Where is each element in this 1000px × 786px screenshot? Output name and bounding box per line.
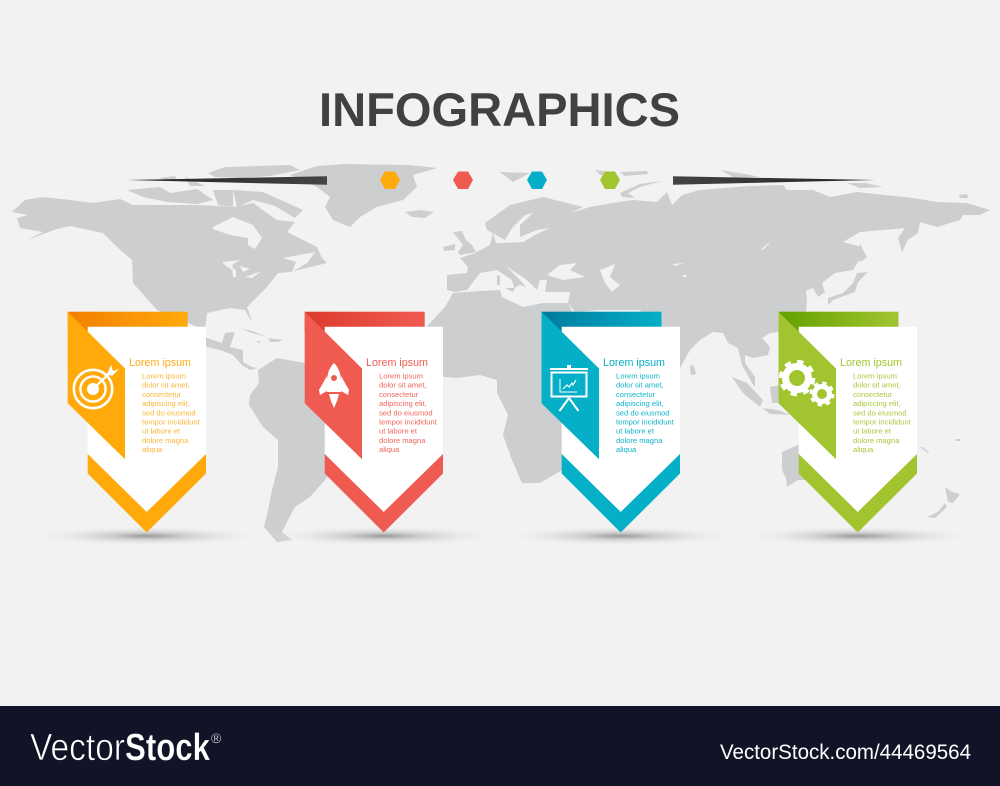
card body text: consectetur xyxy=(616,390,656,399)
icon: target xyxy=(74,365,119,408)
icon: gears xyxy=(781,362,833,405)
card body text: dolor sit amet, xyxy=(616,381,664,390)
card body text: tempor incididunt xyxy=(616,418,675,426)
card body text: Lorem ipsum xyxy=(853,372,897,380)
card body text: adipiscing elit, xyxy=(379,399,427,408)
card heading: Lorem ipsum xyxy=(840,357,902,369)
card body text: dolor sit amet, xyxy=(853,381,901,390)
world map xyxy=(12,164,990,542)
card shadow xyxy=(740,526,976,546)
card body text: aliqua xyxy=(616,445,637,454)
card body text: dolor sit amet, xyxy=(142,381,190,390)
title: INFOGRAPHICS xyxy=(319,84,680,137)
top tab xyxy=(68,312,188,332)
left ribbon xyxy=(305,312,362,459)
card body text: Lorem ipsum xyxy=(142,372,186,380)
card body text: aliqua xyxy=(379,445,400,454)
card body text: ut labore et xyxy=(616,427,655,436)
footer logo xyxy=(30,727,222,769)
card body text: sed do eiusmod xyxy=(142,408,196,417)
card body text: adipiscing elit, xyxy=(142,399,190,408)
panel: green card xyxy=(740,312,976,546)
card shadow xyxy=(266,526,502,546)
card body text: ut labore et xyxy=(853,427,892,436)
bottom chevron xyxy=(562,454,680,532)
footer logo: ® xyxy=(211,730,222,746)
right title rule xyxy=(673,176,875,185)
panel: red card xyxy=(266,312,502,546)
white body xyxy=(88,327,206,512)
card heading: Lorem ipsum xyxy=(603,357,665,369)
bottom chevron xyxy=(799,454,917,532)
card body text: adipiscing elit, xyxy=(853,399,901,408)
card body text: consectetur xyxy=(142,390,182,399)
hexagon: red xyxy=(453,172,473,189)
card shadow xyxy=(503,526,739,546)
card body text: dolore magna xyxy=(379,436,426,445)
card body text: tempor incididunt xyxy=(379,418,438,426)
bottom chevron xyxy=(325,454,443,532)
footer logo: Vector xyxy=(30,727,125,769)
bottom chevron xyxy=(88,454,206,532)
card body text: adipiscing elit, xyxy=(616,399,664,408)
footer logo: Stock xyxy=(125,727,211,769)
footer bar xyxy=(0,706,1000,786)
card body text: consectetur xyxy=(379,390,419,399)
hexagon: blue xyxy=(527,172,547,189)
top tab xyxy=(305,312,425,332)
card body text: consectetur xyxy=(853,390,893,399)
white body xyxy=(799,327,917,512)
white body xyxy=(325,327,443,512)
card body text: Lorem ipsum xyxy=(616,372,660,380)
card body text: dolore magna xyxy=(853,436,900,445)
card body text: dolore magna xyxy=(616,436,663,445)
card heading: Lorem ipsum xyxy=(366,357,428,369)
card body text: aliqua xyxy=(142,445,163,454)
hexagon: orange xyxy=(380,172,400,189)
left title rule xyxy=(125,176,327,185)
left ribbon xyxy=(542,312,599,459)
footer image id: VectorStock.com/44469564 xyxy=(720,741,971,764)
card body text: sed do eiusmod xyxy=(379,408,433,417)
card body text: sed do eiusmod xyxy=(853,408,907,417)
card body text: ut labore et xyxy=(379,427,418,436)
card shadow xyxy=(29,526,265,546)
card body text: Lorem ipsum xyxy=(379,372,423,380)
card body text: tempor incididunt xyxy=(142,418,201,426)
card body text: aliqua xyxy=(853,445,874,454)
panel: orange card xyxy=(29,312,265,546)
left ribbon xyxy=(68,312,125,459)
card body text: dolore magna xyxy=(142,436,189,445)
left ribbon xyxy=(778,312,836,459)
top tab xyxy=(542,312,662,332)
panel: blue card xyxy=(503,312,739,546)
icon: rocket xyxy=(319,363,349,408)
card body text: dolor sit amet, xyxy=(379,381,427,390)
card body text: ut labore et xyxy=(142,427,181,436)
card body text: tempor incididunt xyxy=(853,418,912,426)
top tab xyxy=(778,312,898,332)
white body xyxy=(562,327,680,512)
icon: presentation board xyxy=(550,365,588,411)
hexagon: green xyxy=(600,172,620,189)
card body text: sed do eiusmod xyxy=(616,408,670,417)
card heading: Lorem ipsum xyxy=(129,357,191,369)
